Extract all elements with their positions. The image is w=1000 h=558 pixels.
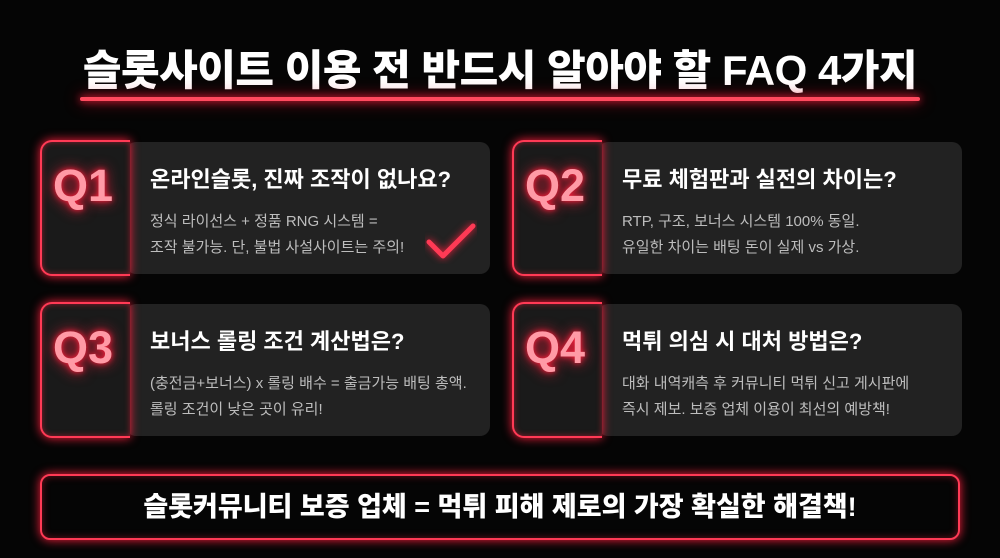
banner <box>40 474 960 540</box>
Q2 text: RTP, 구조, 보너스 시스템 100% 동일. <box>622 213 860 230</box>
Q1 text: 정식 라이선스 + 정품 RNG 시스템 = <box>150 213 378 230</box>
Q4 text: 대화 내역캐측 후 커뮤니티 먹튀 신고 게시판에 <box>622 375 909 392</box>
Q3 text <box>150 375 467 418</box>
Q1 label: Q1 <box>53 160 113 211</box>
panel: Q2 <box>504 132 962 284</box>
panel: Q1 <box>32 132 490 284</box>
Q4 heading: 먹튀 의심 시 대처 방법은? <box>622 329 862 354</box>
Q2 text: 유일한 차이는 배팅 돈이 실제 vs 가상. <box>622 239 859 256</box>
Q3 text: 롤링 조건이 낮은 곳이 유리! <box>150 401 323 418</box>
Q1 heading: 온라인슬롯, 진짜 조작이 없나요? <box>150 167 451 192</box>
banner: 슬롯커뮤니티 보증 업체 = 먹튀 피해 제로의 가장 확실한 해결책! <box>143 492 857 522</box>
Q4 text <box>622 375 909 418</box>
icon: check <box>425 220 477 264</box>
Q3 text: (충전금+보너스) x 롤링 배수 = 출금가능 배팅 총액. <box>150 375 467 392</box>
Q1 text <box>150 213 404 256</box>
Q4 text: 즉시 제보. 보증 업체 이용이 최선의 예방책! <box>622 401 890 418</box>
Q2 text <box>622 213 860 256</box>
Q3 label: Q3 <box>53 322 113 373</box>
panel: Q3 <box>32 294 490 446</box>
Q4 label: Q4 <box>525 322 585 373</box>
Q2 heading: 무료 체험판과 실전의 차이는? <box>622 167 897 192</box>
Q1 text: 조작 불가능. 단, 불법 사설사이트는 주의! <box>150 239 404 256</box>
panel: Q4 <box>504 294 962 446</box>
title: 슬롯사이트 이용 전 반드시 알아야 할 FAQ 4가지 <box>83 47 917 94</box>
Q2 label: Q2 <box>525 160 585 211</box>
Q3 heading: 보너스 롤링 조건 계산법은? <box>150 329 404 354</box>
